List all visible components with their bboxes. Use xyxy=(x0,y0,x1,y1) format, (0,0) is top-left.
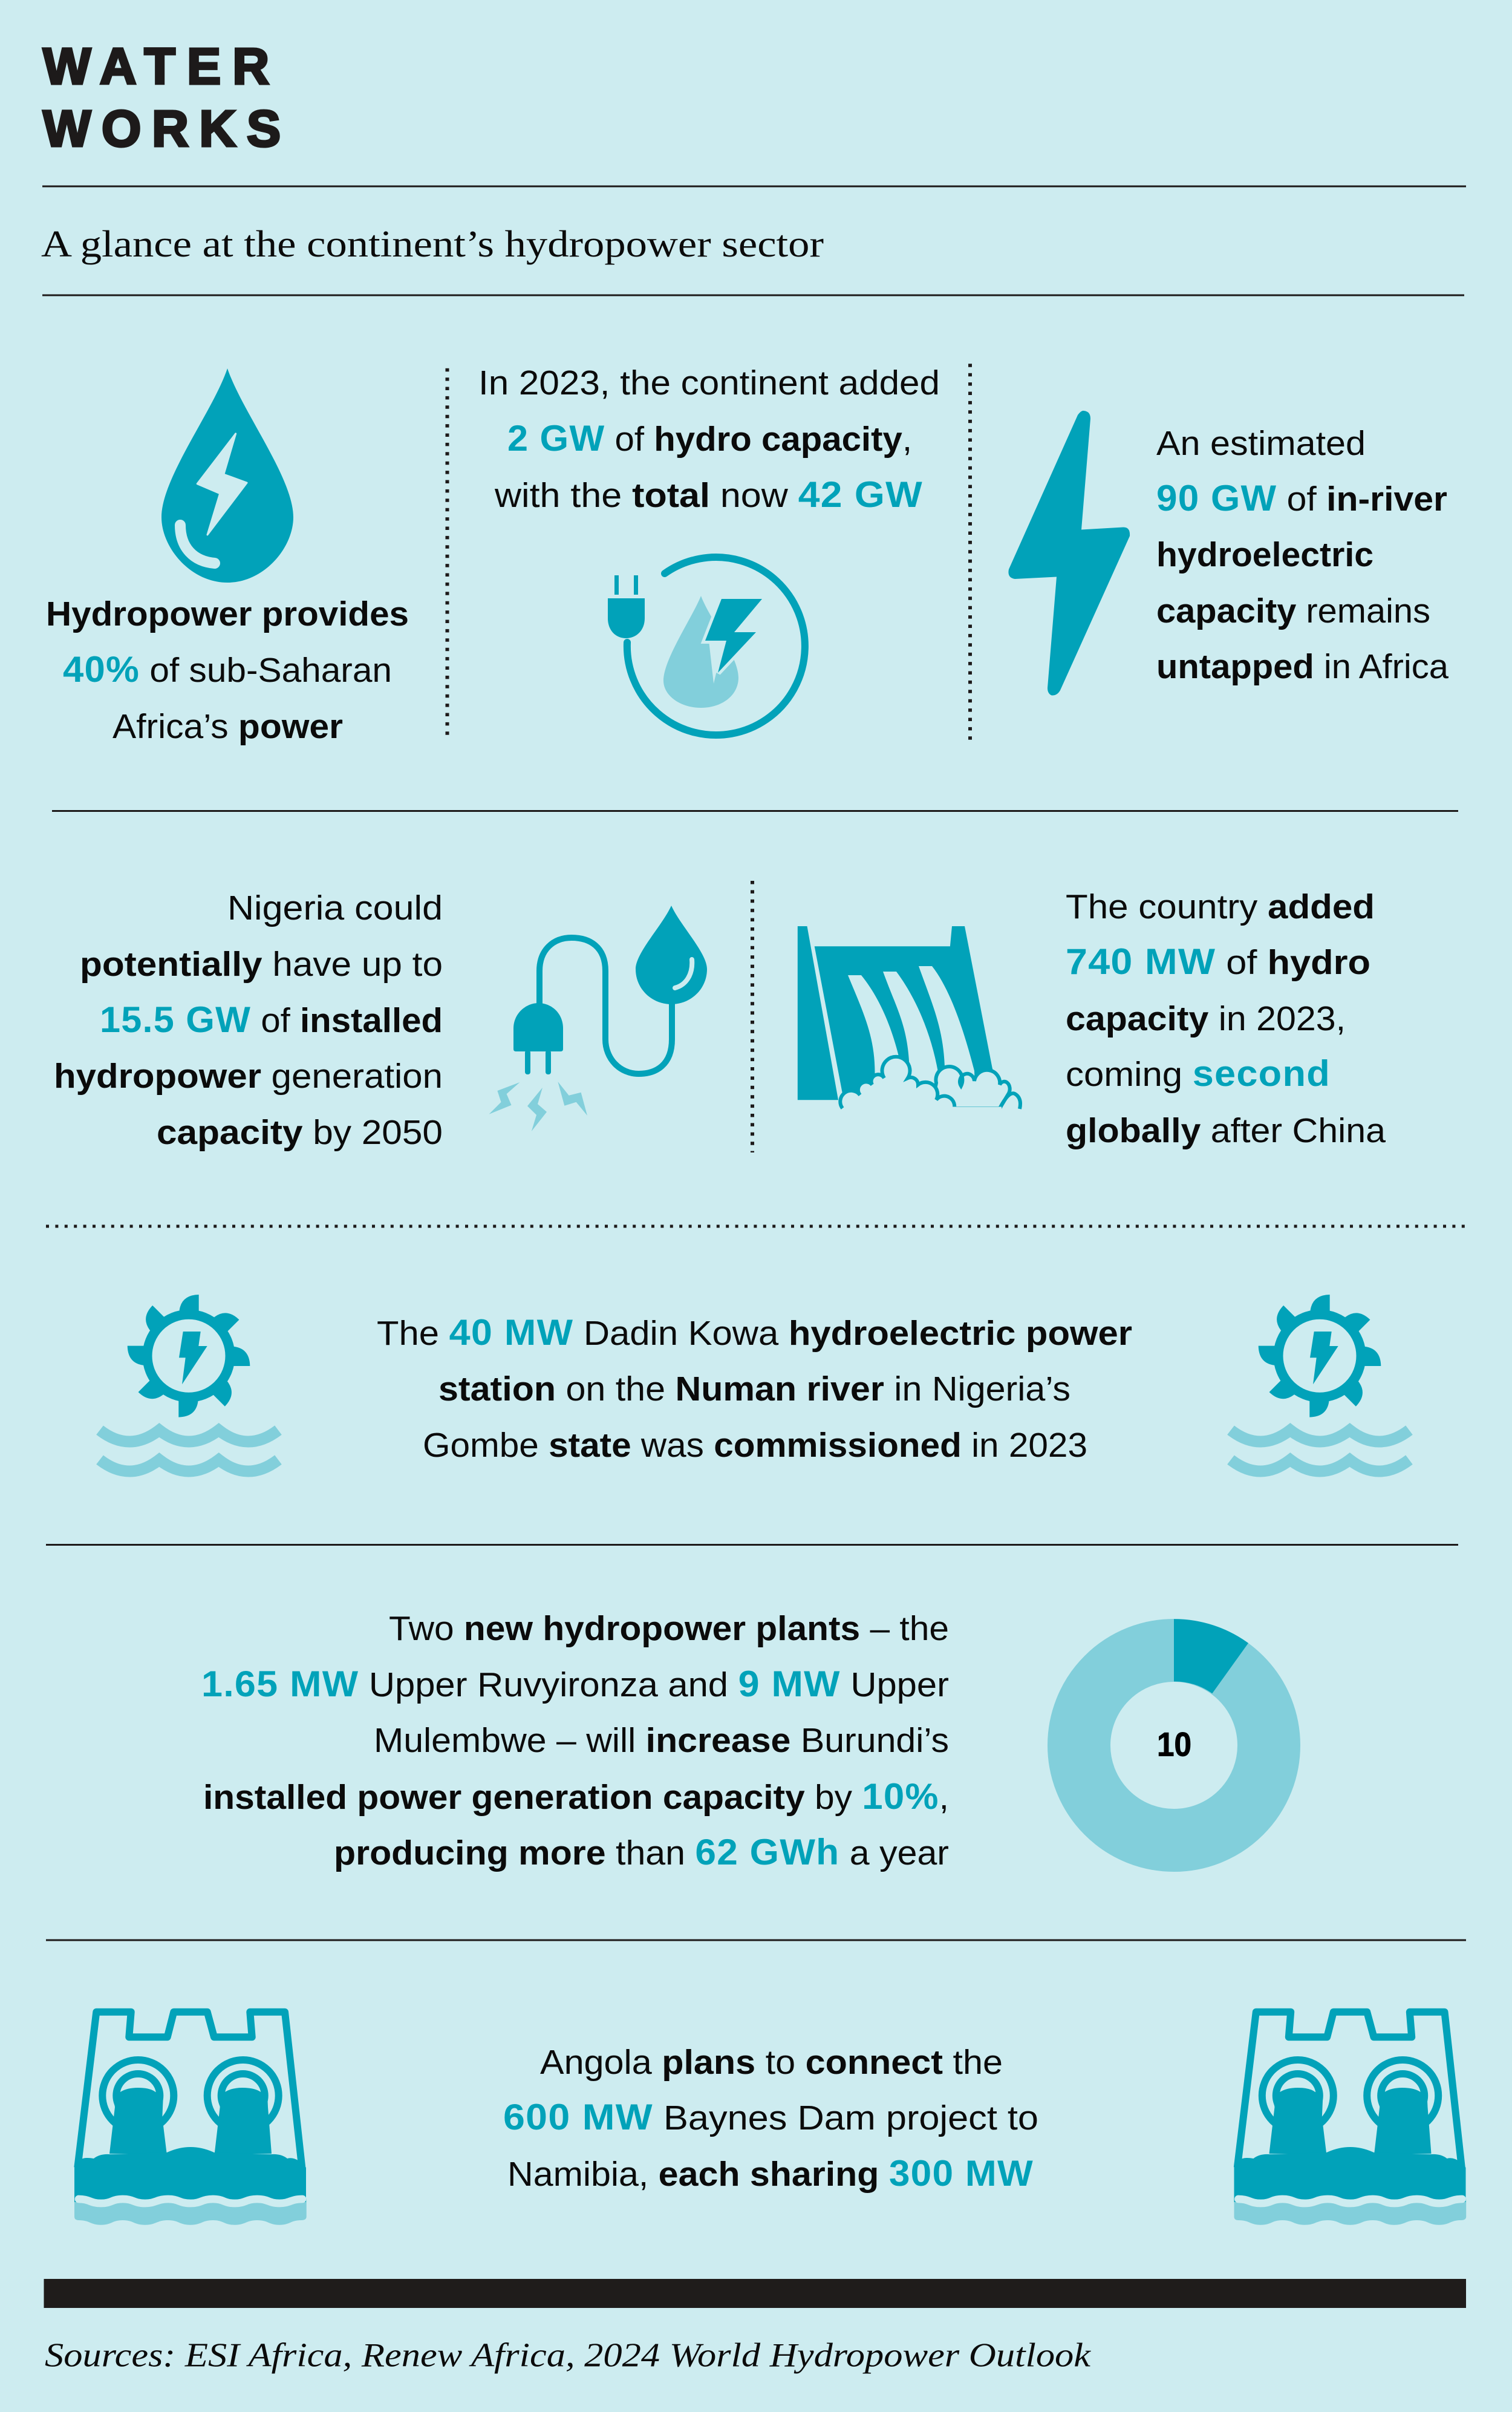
text: untapped capacity: 90 GW of in-river xyxy=(1156,478,1447,518)
footer bar xyxy=(44,2279,1466,2308)
text: hydropower provides 40% xyxy=(46,595,409,746)
text: Baynes Dam: Angola plans to connect the xyxy=(540,2043,1003,2082)
text: Nigeria potential: Nigeria could xyxy=(227,889,443,927)
text: Burundi plants: installed power generation capacity by 10%, xyxy=(203,1776,949,1817)
icon: lightning bolt xyxy=(1008,411,1130,696)
icon: plug with drop and bolt xyxy=(608,557,805,735)
text: untapped capacity: An estimated xyxy=(1156,424,1366,463)
icon: dam gates right xyxy=(1234,2012,1466,2225)
text: Burundi plants: Mulembwe – will increase Burundi’s xyxy=(374,1721,949,1760)
text: 2023 capacity xyxy=(478,364,940,515)
subtitle: A glance at the continent’s hydropower sector xyxy=(41,224,824,265)
text: Burundi plants: 1.65 MW Upper Ruvyironza and 9 MW Upper xyxy=(201,1664,949,1704)
text: 740 MW second globally: The country added xyxy=(1066,887,1375,926)
icon: water drop with bolt xyxy=(161,368,293,583)
text: untapped capacity: capacity remains xyxy=(1156,592,1430,630)
donut chart: 10 percent xyxy=(1079,1619,1269,1840)
text: Baynes Dam: 600 MW Baynes Dam project to xyxy=(503,2097,1038,2137)
panel: Dadin Kowa xyxy=(100,1295,1409,1471)
text: Nigeria potential xyxy=(54,889,443,1152)
panel: 90 GW untapped xyxy=(1008,411,1448,696)
text: 740 MW second globally: coming second xyxy=(1066,1053,1331,1094)
text: Burundi plants: Two new hydropower plants – the xyxy=(389,1609,949,1648)
panel: Burundi plants xyxy=(201,1609,1269,1872)
panel: Nigeria potential xyxy=(54,889,707,1152)
text: untapped capacity: untapped in Africa xyxy=(1156,647,1448,686)
title: WORKS xyxy=(43,100,281,157)
text: 740 MW second globally xyxy=(1066,887,1386,1150)
text: untapped capacity: hydroelectric xyxy=(1156,535,1374,574)
text: 2023 capacity: 2 GW of hydro capacity, xyxy=(507,418,912,459)
text: Nigeria potential: 15.5 GW of installed xyxy=(100,999,443,1040)
text: 2023 capacity: with the total now 42 GW xyxy=(494,474,923,515)
text: untapped capacity xyxy=(1156,424,1448,686)
text: 740 MW second globally: globally after China xyxy=(1066,1111,1386,1150)
donut chart: 10 percent: 10 xyxy=(1157,1725,1191,1763)
text: 2023 capacity: In 2023, the continent added xyxy=(478,364,940,402)
text: Nigeria potential: potentially have up to xyxy=(80,945,443,984)
panel: Angola Baynes Dam xyxy=(74,2012,1466,2225)
icon: water wheel left xyxy=(100,1295,278,1471)
text: Baynes Dam xyxy=(503,2043,1038,2194)
text: Dadin Kowa station xyxy=(377,1312,1132,1465)
text: Dadin Kowa station: station on the Numan river in Nigeria’s xyxy=(438,1370,1070,1408)
icon: water wheel right xyxy=(1231,1295,1409,1471)
icon: plug, cord and drop xyxy=(489,906,707,1131)
text: Dadin Kowa station: Gombe state was commissioned in 2023 xyxy=(423,1426,1087,1465)
text: hydropower provides 40%: Africa’s power xyxy=(112,707,343,746)
text: Baynes Dam: Namibia, each sharing 300 MW xyxy=(507,2153,1034,2194)
text: 740 MW second globally: 740 MW of hydro xyxy=(1066,941,1370,982)
sources: Sources: ESI Africa, Renew Africa, 2024 World Hydropower Outlook xyxy=(45,2336,1091,2374)
panel: 40% of power xyxy=(46,368,409,746)
text: Nigeria potential: hydropower generation xyxy=(54,1057,443,1096)
text: hydropower provides 40%: Hydropower provides xyxy=(46,595,409,633)
text: 740 MW second globally: capacity in 2023, xyxy=(1066,999,1346,1038)
icon: dam gates left xyxy=(74,2012,307,2225)
text: Nigeria potential: capacity by 2050 xyxy=(157,1113,443,1152)
text: Burundi plants: producing more than 62 GWh a year xyxy=(334,1832,949,1872)
panel: 2 GW added xyxy=(478,364,940,735)
title: WATER xyxy=(43,38,269,94)
title xyxy=(43,38,281,157)
icon: dam with waterfall xyxy=(798,926,1020,1114)
text: Burundi plants xyxy=(201,1609,949,1872)
text: Dadin Kowa station: The 40 MW Dadin Kowa hydroelectric power xyxy=(377,1312,1132,1353)
text: hydropower provides 40%: 40% of sub-Saharan xyxy=(63,649,392,690)
panel: 740 MW added xyxy=(798,887,1386,1150)
